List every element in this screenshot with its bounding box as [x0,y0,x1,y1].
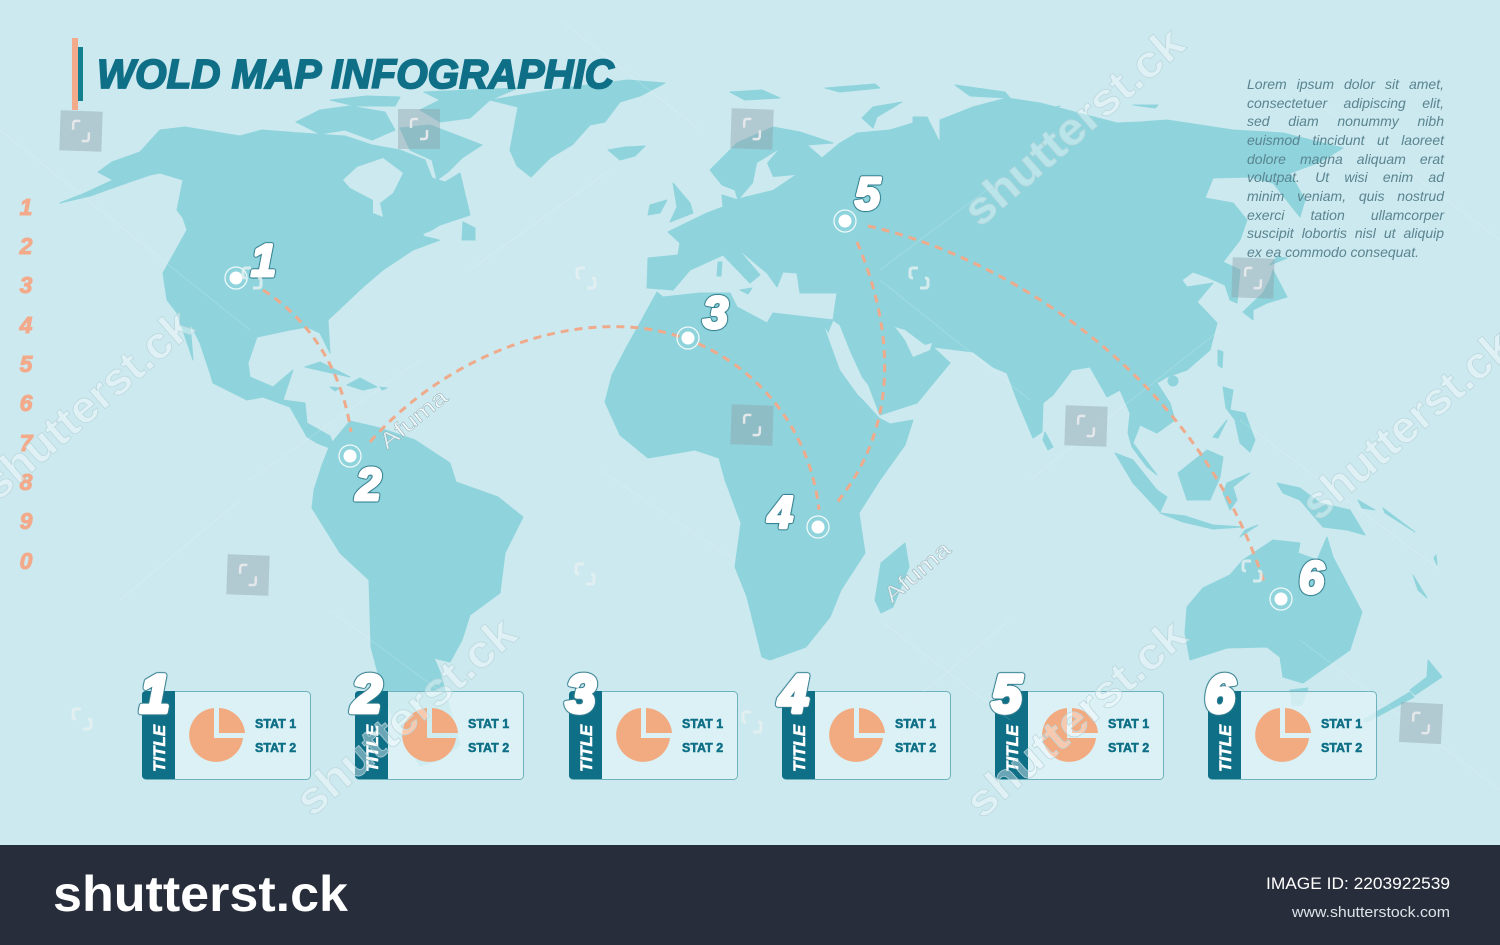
watermark squares [59,108,1443,744]
marker 1 [225,267,247,289]
Caribbean islands [305,362,387,391]
body paragraph: volutpat. Ut wisi enim ad [1247,169,1444,185]
watermark text: Afuma [879,536,956,608]
card 3: 3 [566,665,595,724]
side number column: 5 [20,351,34,377]
watermark swirl marks [73,268,1261,732]
side number column: 8 [20,469,33,495]
arc 2 to 3 to 4 [370,327,819,510]
card 5: STAT 2 [1108,741,1149,755]
body paragraph: exerci tation ullamcorper [1247,207,1444,223]
map number 6: 6 [1299,552,1325,603]
card 2: STAT 2 [468,741,509,755]
map numbers [251,168,1325,603]
body paragraph [1247,76,1444,260]
side number column: 6 [20,390,33,416]
North America [60,127,470,450]
card 4: STAT 1 [895,717,936,731]
card 1: STAT 2 [255,741,296,755]
side number column: 9 [20,508,33,534]
Madagascar [875,543,909,613]
Persian Gulf [895,327,932,357]
marker 5 [834,210,856,232]
Gulf of St Lawrence [423,224,450,241]
marker 6 [1270,588,1292,610]
Iceland [608,146,645,160]
New Zealand [1363,660,1442,722]
Philippines [1213,387,1255,452]
body paragraph: dolore magna aliquam erat [1247,151,1444,167]
seas [343,150,932,414]
card 1 [140,665,310,780]
body paragraph: consectetuer adipiscing elit, [1247,95,1444,111]
card 3 [566,665,738,780]
card 3: STAT 1 [682,717,723,731]
Arctic Russia islands [730,84,1158,128]
map number 2: 2 [355,459,381,510]
card 1: STAT 1 [255,717,296,731]
title: WOLD MAP INFOGRAPHIC [97,51,615,97]
card 5 [992,665,1164,780]
body paragraph: minim veniam, quis nostrud [1247,188,1444,204]
Red Sea [825,328,879,414]
card 6: STAT 1 [1321,717,1362,731]
card 6: TITLE [1216,724,1235,772]
card 4: 4 [778,665,808,724]
body paragraph: suscipit lobortis nisl ut aliquip [1247,225,1444,241]
side number column: 7 [20,430,34,456]
Taiwan [1218,350,1223,368]
watermark text: shutterst.ck [285,606,527,826]
side number column: 3 [20,272,33,298]
marker 3 [677,327,699,349]
Japan [1243,257,1287,320]
card 6: STAT 2 [1321,741,1362,755]
Hainan [1168,376,1178,386]
map number 3: 3 [703,287,728,338]
Baffin Island [400,125,482,180]
map markers [225,210,1292,610]
card 5: TITLE [1003,724,1022,772]
card 2: 2 [351,665,381,724]
Java [1160,513,1258,537]
card 3: STAT 2 [682,741,723,755]
side number column [19,194,34,574]
Australia [1185,537,1362,683]
map number 1: 1 [251,235,276,286]
website: www.shutterstock.com [1291,905,1450,921]
Eurasia [647,98,1343,475]
card 1: 1 [140,665,169,724]
footer bar [0,845,1500,945]
side number column: 4 [19,312,33,338]
marker 4 [807,516,829,538]
watermark text: Afuma [374,384,453,454]
map number 5: 5 [855,168,881,219]
arc 5 to 6 [868,226,1264,582]
Sumatra [1115,453,1167,512]
card 1: TITLE [150,724,169,772]
image id: IMAGE ID: 2203922539 [1266,875,1450,893]
South America [312,421,523,766]
body paragraph: sed diam nonummy nibh [1247,113,1444,129]
Mediterranean islands [717,262,752,294]
card 5: 5 [992,665,1023,724]
card 2 [351,665,524,780]
Arctic islands [296,88,518,140]
body paragraph: euismod tincidunt ut laoreet [1247,132,1444,148]
card 2: STAT 1 [468,717,509,731]
arc 1 to 2 [263,290,351,432]
body paragraph: Lorem ipsum dolor sit amet, [1247,76,1444,92]
side number column: 0 [20,548,33,574]
Sulawesi [1223,473,1250,510]
card 4: TITLE [790,724,809,772]
arc 4 to 5 [835,242,885,505]
card 6 [1205,665,1376,780]
Borneo [1178,450,1223,500]
Hudson Bay [343,158,403,217]
card 4 [778,665,950,780]
marker 2 [339,445,361,467]
footer logo: shutterst.ck [53,866,348,922]
Greenland [490,80,665,177]
map number 4: 4 [767,487,793,538]
card 3: TITLE [577,724,596,772]
card 6: 6 [1205,665,1235,724]
Tasmania [1290,688,1308,706]
Newfoundland [462,222,475,240]
Sri Lanka [1043,432,1053,450]
British Isles [648,183,693,222]
card 5: STAT 1 [1108,717,1149,731]
watermark text: shutterst.ck [955,608,1197,828]
body paragraph: ex ea commodo consequat. [1247,244,1419,260]
side number column: 2 [19,233,33,259]
Africa [605,292,913,660]
Baltic Sea [740,150,795,198]
New Guinea [1277,483,1365,535]
route arcs [263,226,1264,582]
side number column: 1 [20,194,32,220]
Pacific islands [1358,500,1437,598]
world map [60,80,1442,766]
title accent bars [72,38,83,110]
card 4: STAT 2 [895,741,936,755]
watermark text: shutterst.ck [953,16,1195,236]
card 2: TITLE [363,724,382,772]
